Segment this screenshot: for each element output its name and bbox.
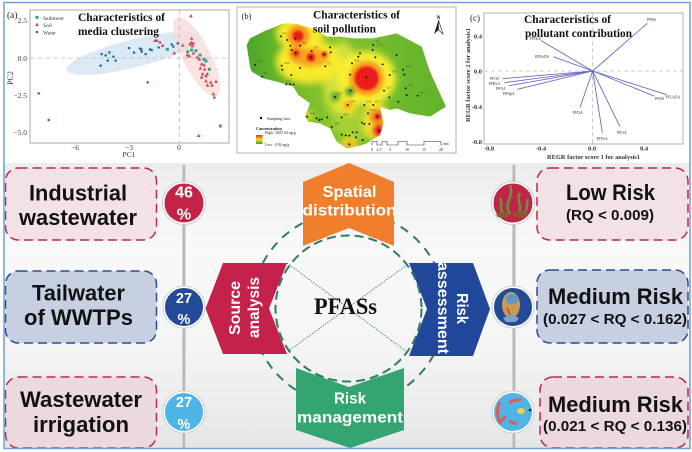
scatter axis tick labels: 0.0 xyxy=(18,54,27,63)
map legend xyxy=(256,116,296,147)
map scale bar: 5 xyxy=(389,147,391,152)
percentage badge 46%: % xyxy=(177,206,191,224)
risk box: low risk xyxy=(537,168,688,240)
percentage badge 27% blue: % xyxy=(178,312,191,328)
site labels: S67 xyxy=(374,100,380,104)
risk assessment tag xyxy=(409,262,490,356)
spatial distribution tag: distribution xyxy=(302,202,396,220)
icon: tropical fish xyxy=(492,391,534,433)
map label b: (b) xyxy=(242,11,252,21)
biplot axis labels: REGR factor score 2 for analysis1 xyxy=(466,28,472,122)
site labels: S13 xyxy=(369,108,375,112)
source box: wastewater irrigation: Wastewater xyxy=(20,387,142,412)
biplot vector labels: PFHxS xyxy=(530,37,541,41)
heading c: pollutant contribution xyxy=(525,26,632,40)
map legend: High : 5657.64 ng/g xyxy=(265,131,296,135)
scatter axis tick labels xyxy=(6,16,181,159)
map scale bar: 10 xyxy=(405,147,409,152)
source analysis tag xyxy=(206,263,287,354)
spatial distribution tag: Spatial xyxy=(322,184,376,201)
site labels: S23 xyxy=(337,92,342,96)
panel: pollutant contribution biplot xyxy=(466,12,683,161)
site labels: S7 xyxy=(263,71,267,75)
legend labels: Sediment xyxy=(43,16,64,22)
site labels: S37 xyxy=(408,83,414,87)
map scale bar xyxy=(371,141,449,152)
source box: wastewater irrigation: irrigation xyxy=(33,412,129,437)
biplot axis labels: 0.4 xyxy=(640,146,649,152)
biplot axis labels: -0.8 xyxy=(472,139,483,146)
source box: tailwater of WWTPs: Tailwater xyxy=(32,280,125,306)
risk management tag xyxy=(296,368,404,448)
cluster ellipses and points xyxy=(30,10,229,143)
right timeline line xyxy=(512,165,516,449)
site labels: S27 xyxy=(386,85,392,89)
icon: fish in water xyxy=(492,286,534,328)
biplot vector labels: PFPeA xyxy=(597,137,608,141)
dotted cross xyxy=(287,263,407,352)
biplot vector labels xyxy=(488,18,681,141)
risk box: medium risk pink: (0.021 < RQ < 0.136) xyxy=(543,419,687,435)
source box: tailwater of WWTPs: of WWTPs xyxy=(24,305,133,330)
percentage badge 27% light blue xyxy=(163,391,205,433)
map frame xyxy=(237,7,456,153)
site labels: S4 xyxy=(375,40,379,44)
risk box: low risk: (RQ < 0.009) xyxy=(566,208,654,224)
PFASs label: PFASs xyxy=(314,294,377,319)
source analysis tag: Source xyxy=(227,281,244,335)
biplot vector labels: PFDoDA xyxy=(535,55,550,59)
source analysis tag: analysis xyxy=(246,277,263,338)
site labels: S55 xyxy=(392,70,397,74)
inner dashed ring xyxy=(276,236,422,382)
risk box: medium risk blue: (0.027 < RQ < 0.162) xyxy=(543,312,687,328)
risk box: medium risk blue: Medium Risk xyxy=(548,284,684,309)
site labels: S1 xyxy=(282,31,286,35)
risk assessment tag: Risk xyxy=(453,293,470,324)
source box: industrial wastewater xyxy=(6,168,156,240)
panel: media clustering scatter plot xyxy=(6,10,229,159)
site labels: S11 xyxy=(257,59,262,63)
spatial distribution tag xyxy=(302,163,396,246)
percentage badge 27% blue: 27 xyxy=(176,291,192,307)
biplot axis labels: 0.0 xyxy=(474,68,482,76)
map legend: Low : 0.92 ng/g xyxy=(265,143,289,147)
map scale bar: 15 xyxy=(422,147,426,152)
biplot axis labels: -0.4 xyxy=(472,104,483,111)
risk management tag: Risk xyxy=(334,390,366,408)
site labels: S70 xyxy=(286,79,292,83)
biplot vectors xyxy=(484,13,683,144)
icon: north arrow: N xyxy=(437,15,441,21)
site labels: S39 xyxy=(343,112,349,116)
scatter plot frame xyxy=(30,10,229,143)
biplot vector labels: PFOS xyxy=(490,77,499,81)
site labels: S32 xyxy=(406,64,411,68)
map scale bar: 0 xyxy=(371,147,373,152)
biplot vector labels: PFBS xyxy=(647,18,656,22)
risk box: low risk: Low Risk xyxy=(566,180,656,205)
legend labels: Soil xyxy=(43,23,52,29)
heading b: Characteristics of xyxy=(313,8,401,22)
scatter axis tick labels: 0 xyxy=(177,143,181,152)
heading b: soil pollution xyxy=(313,22,376,36)
source box: wastewater irrigation xyxy=(6,377,156,448)
heading c: Characteristics of xyxy=(524,12,612,26)
risk management tag: management xyxy=(297,410,403,426)
site labels: S33 xyxy=(284,61,290,65)
icon: north arrow xyxy=(434,15,443,34)
icon: aquatic plant xyxy=(492,182,534,224)
source box: industrial wastewater: Industrial xyxy=(29,180,127,206)
percentage badge 27% light blue: % xyxy=(178,417,191,433)
scatter axis tick labels: PC1 xyxy=(123,150,136,159)
site labels: S35 xyxy=(354,59,360,63)
biplot frame xyxy=(484,13,683,144)
biplot vector labels: PFBA xyxy=(655,97,665,101)
heading a: Characteristics of xyxy=(78,10,166,24)
percentage badge 27% light blue: 27 xyxy=(176,395,192,411)
site labels: S64 xyxy=(310,111,316,115)
lower section background xyxy=(4,163,690,449)
sampling sites xyxy=(254,35,419,145)
site labels: S2 xyxy=(303,41,307,45)
biplot vector labels: PFHxA xyxy=(488,82,500,86)
scatter axis tick labels: −2.5 xyxy=(13,91,27,100)
map scale bar: km xyxy=(443,141,449,146)
scatter axis tick labels: −5.0 xyxy=(13,128,27,137)
site labels: S47 xyxy=(313,46,319,50)
site labels: S43 xyxy=(366,100,372,104)
scatter axis tick labels: 2.5 xyxy=(18,16,27,25)
risk box: medium risk pink: Medium Risk xyxy=(548,392,684,417)
panel: soil pollution map xyxy=(237,7,456,153)
legend labels: Water xyxy=(43,30,56,36)
biplot axis labels: REGR factor score 1 for analysis1 xyxy=(547,155,640,161)
scatter axis tick labels: PC2 xyxy=(6,71,15,85)
biplot vector labels: PFNA xyxy=(496,87,506,91)
biplot axis labels xyxy=(466,28,649,161)
biplot axis labels: 0.0 xyxy=(588,146,596,152)
map scale bar: 2.5 xyxy=(376,147,382,152)
site labels: S69 xyxy=(350,100,356,104)
central diagram xyxy=(206,163,490,448)
heading a: media clustering xyxy=(78,24,159,38)
site labels: S43 xyxy=(378,43,384,47)
percentage badge 46% xyxy=(162,182,206,224)
site labels xyxy=(257,31,425,126)
biplot vector labels: PFDA xyxy=(573,111,583,115)
biplot axis labels: 0.4 xyxy=(474,34,483,40)
map legend: Concentration xyxy=(256,126,282,131)
site labels: S68 xyxy=(334,122,340,126)
scatter axis tick labels: −3 xyxy=(125,143,133,152)
panel label a: (a) xyxy=(7,10,18,21)
site labels: S3 xyxy=(327,61,331,65)
source box: tailwater of WWTPs xyxy=(6,271,156,343)
biplot axis labels: -0.4 xyxy=(536,146,547,152)
biplot axis labels: -0.8 xyxy=(484,146,495,152)
heat map xyxy=(246,23,446,148)
risk assessment tag: assessment xyxy=(434,262,451,354)
map scale bar: 20 xyxy=(439,147,443,152)
percentage badge 46%: 46 xyxy=(175,184,193,202)
legend labels xyxy=(43,16,64,36)
percentage badge 27% blue xyxy=(163,286,205,328)
biplot vector labels: PFHpA xyxy=(503,92,515,96)
outer dashed ring xyxy=(252,212,446,406)
risk box: medium risk pink xyxy=(540,377,688,448)
site labels: S24 xyxy=(419,90,425,94)
left timeline line xyxy=(182,165,186,449)
risk box: medium risk blue xyxy=(537,270,688,343)
map legend: Sampling sites xyxy=(267,116,291,121)
biplot vector labels: PFUnDA xyxy=(666,96,681,100)
scatter axis tick labels: −6 xyxy=(71,143,79,152)
source box: industrial wastewater: wastewater xyxy=(18,205,137,230)
biplot vector labels: PFOA xyxy=(617,131,627,135)
panel label c: (c) xyxy=(470,13,480,23)
